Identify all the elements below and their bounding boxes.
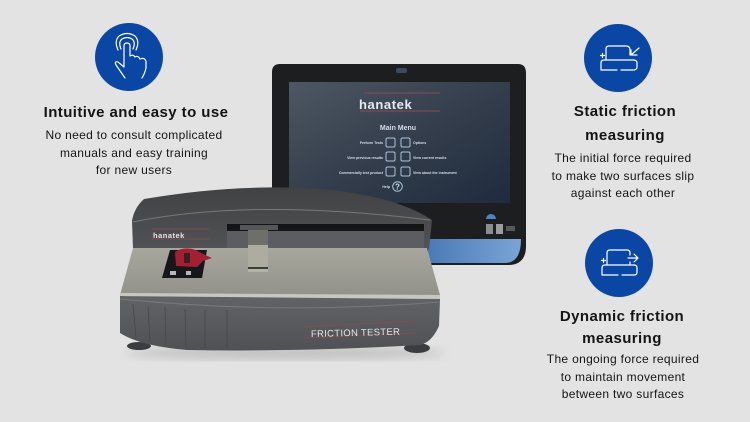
- heading: dynamic friction: Dynamic friction: [560, 308, 684, 325]
- tester slot: [227, 224, 424, 248]
- friction tester label: [304, 321, 415, 340]
- heading: intuitive: Intuitive and easy to use: [44, 104, 228, 121]
- friction tester label: FRICTION TESTER: [311, 327, 401, 340]
- screen main menu: ?: [395, 182, 400, 192]
- text: intuitive description: manuals and easy training: [60, 146, 208, 160]
- text: dynamic friction description: [547, 352, 699, 401]
- heading: static friction: Static friction: [574, 103, 676, 120]
- text: intuitive description: for new users: [96, 163, 172, 177]
- icon: static friction: [584, 24, 652, 92]
- screen main menu: Help: [382, 185, 390, 189]
- heading: static friction: [574, 103, 676, 144]
- screen main menu: View about the instrument: [413, 171, 458, 175]
- text: static friction description: The initial force required: [554, 151, 692, 165]
- tester sled: [240, 225, 278, 272]
- monitor screen: [289, 82, 510, 203]
- screen main menu: [339, 125, 458, 192]
- text: static friction description: [552, 151, 694, 200]
- heading: static friction: measuring: [585, 127, 665, 144]
- text: intuitive description: [45, 128, 223, 177]
- tester hood logo: [152, 229, 209, 240]
- screen main menu: View current results: [413, 156, 446, 160]
- screen main menu: Perform Tests: [360, 141, 383, 145]
- text: dynamic friction description: The ongoing force required: [547, 352, 699, 366]
- text: static friction description: against each other: [571, 186, 675, 200]
- screen logo: [359, 93, 440, 112]
- monitor: [272, 64, 526, 265]
- icon: hand touch: [95, 23, 163, 91]
- text: intuitive description: No need to consult complicated: [45, 128, 223, 142]
- red sample holder: [162, 248, 212, 278]
- tester hood: [132, 187, 432, 249]
- tester top plate: [120, 248, 440, 295]
- heading: dynamic friction: [560, 308, 684, 346]
- screen logo: hanatek: [359, 97, 413, 112]
- tester front panel: [120, 296, 440, 350]
- heading: dynamic friction: measuring: [582, 330, 662, 346]
- tester hood logo: hanatek: [153, 231, 185, 240]
- screen main menu: Options: [413, 141, 426, 145]
- tester feet: [127, 342, 430, 353]
- camera: [396, 68, 407, 73]
- friction tester: [120, 187, 440, 353]
- screen main menu: View previous results: [347, 156, 383, 160]
- screen main menu: Commercially test product: [339, 171, 384, 175]
- text: dynamic friction description: to maintain movement: [561, 370, 685, 384]
- tester shadow: [125, 346, 445, 360]
- text: static friction description: to make two surfaces slip: [552, 168, 694, 182]
- monitor body: [272, 64, 526, 265]
- icon: dynamic friction: [585, 229, 653, 297]
- monitor blue base: [428, 239, 521, 263]
- text: dynamic friction description: between two surfaces: [562, 387, 684, 401]
- monitor buttons: [486, 214, 515, 234]
- screen main menu: Main Menu: [380, 125, 416, 132]
- tester plate edge: [120, 293, 440, 299]
